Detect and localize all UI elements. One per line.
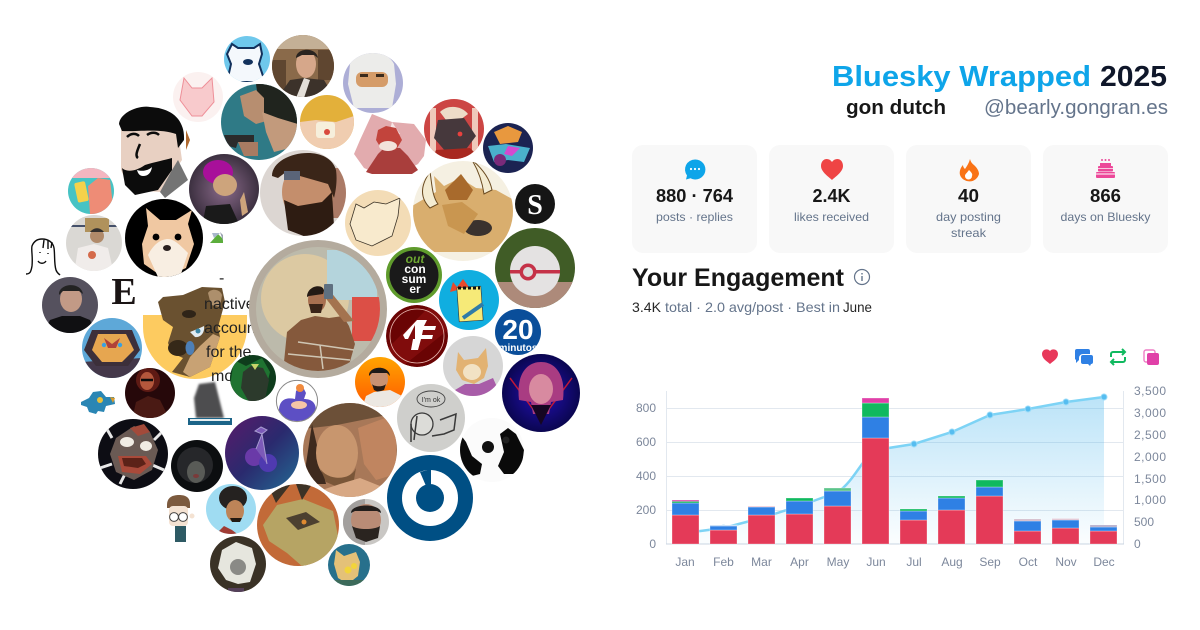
right axis labels: 1,500 <box>1134 472 1166 486</box>
right axis labels: 3,000 <box>1134 406 1166 420</box>
bar: Sep <box>976 480 1003 544</box>
icon: info <box>854 270 870 284</box>
bar: Aug <box>938 496 965 544</box>
avatar: man on orange <box>355 357 408 408</box>
month labels: Aug <box>941 555 963 569</box>
icon: flame <box>960 159 979 181</box>
avatar: fox character <box>443 336 503 396</box>
avatar: purple bear outline <box>276 380 318 423</box>
avatar: S logo: S <box>527 190 543 221</box>
avatar: colourful creature <box>483 123 533 173</box>
cumulative line <box>685 397 1104 533</box>
left axis labels: 200 <box>636 503 656 517</box>
stat card: days on Bluesky <box>1043 145 1168 253</box>
icon: quotes <box>1144 350 1159 365</box>
avatar: 4F logo <box>386 305 448 370</box>
avatar: S logo <box>515 184 555 224</box>
avatar: woman with gun <box>221 84 300 160</box>
avatar: cherries <box>225 416 299 490</box>
text: avatar alt text overflow: accoun <box>204 320 256 337</box>
avatar: man in black shirt <box>42 277 98 336</box>
avatar: roman statue <box>502 354 580 432</box>
line points <box>682 394 1107 536</box>
month labels: May <box>827 555 849 569</box>
avatar: sketched cat <box>345 190 411 256</box>
stat value: 866 <box>1090 186 1121 206</box>
bar: Feb <box>710 525 737 544</box>
bar: Mar <box>748 506 775 544</box>
month labels: Dec <box>1093 555 1115 569</box>
left axis labels: 800 <box>636 401 656 415</box>
month labels: Oct <box>1019 555 1038 569</box>
avatar: cartoon man with glasses <box>167 495 194 542</box>
handle: @bearly.gongran.es <box>984 97 1168 119</box>
bar: Nov <box>1052 518 1079 544</box>
avatar: pink wolf <box>173 72 223 122</box>
text: avatar alt text overflow: for the <box>206 344 251 361</box>
month labels: Jul <box>906 555 922 569</box>
avatar: bald man <box>303 403 397 498</box>
right axis labels: 2,000 <box>1134 450 1166 464</box>
avatar cloud panel <box>26 35 580 594</box>
text: avatar alt text overflow: nactive <box>204 296 255 313</box>
avatar: "I'm ok" doodle <box>397 384 465 452</box>
stat value: 40 <box>958 186 979 206</box>
avatar: cream fox on teal <box>328 544 370 586</box>
avatar: bearded man <box>260 150 348 240</box>
icon: likes <box>1042 349 1058 364</box>
avatar: antlered creature <box>257 484 339 567</box>
avatar: purple-haired character <box>189 154 259 226</box>
month labels: Mar <box>751 555 772 569</box>
engagement summary: June <box>843 299 872 315</box>
text: avatar alt text overflow: mo <box>211 368 233 385</box>
avatar: black and white dog <box>460 428 524 476</box>
avatar: tea and hands <box>300 95 354 149</box>
engagement summary: 3.4K <box>632 299 662 315</box>
stat label: streak <box>951 226 987 240</box>
avatar: otter with phone <box>68 168 114 214</box>
avatar: 20 minutos logo: 20 <box>502 314 534 345</box>
avatar: man with split face <box>343 499 389 545</box>
month labels: Apr <box>790 555 809 569</box>
avatar: green wolf <box>230 355 276 402</box>
left axis labels <box>636 401 656 551</box>
bar: Oct <box>1014 519 1041 544</box>
left axis labels: 400 <box>636 469 656 483</box>
month labels: Nov <box>1055 555 1077 569</box>
icon: reposts <box>1111 349 1125 365</box>
avatar: comic man with beard <box>119 107 190 198</box>
avatar: dark-haired woman <box>171 440 223 492</box>
right axis labels: 1,000 <box>1134 493 1166 507</box>
stat label <box>936 210 1001 240</box>
avatar: outconsumer logo <box>386 247 442 303</box>
stat value: 2.4K <box>812 186 850 206</box>
avatar: bear on keyboard <box>188 382 232 425</box>
heading: your engagement: Your Engagement <box>632 264 845 292</box>
cumulative area <box>685 397 1104 544</box>
bar: Jan <box>672 500 699 544</box>
avatar: ghost line drawing <box>26 239 60 275</box>
title: Bluesky Wrapped <box>832 61 1091 93</box>
left axis labels: 600 <box>636 435 656 449</box>
avatar: E logo: E <box>111 271 137 313</box>
avatar: pixel blue creature <box>81 391 115 414</box>
stat card: streak <box>906 145 1031 253</box>
avatar: man in red light <box>125 368 175 420</box>
avatar: man in suit <box>272 35 336 100</box>
text: avatar alt text overflow: - <box>219 270 224 287</box>
icon: broken image <box>210 232 223 243</box>
month labels: Sep <box>979 555 1001 569</box>
text: avatar alt text overflow <box>204 270 256 385</box>
stat label: days on Bluesky <box>1060 210 1150 224</box>
icon: replies <box>1075 349 1093 366</box>
icon: heart <box>821 159 843 180</box>
avatar: bull <box>412 160 514 261</box>
avatar: notepad <box>439 270 499 330</box>
engagement summary: total · 2.0 avg/post · Best in <box>665 299 840 315</box>
bar: Apr <box>786 498 813 544</box>
avatar: pokeball <box>495 228 575 308</box>
avatar: outconsumer logo: con <box>404 262 426 276</box>
stat card: likes <box>769 145 894 253</box>
title: 2025 <box>1100 61 1167 93</box>
right axis labels: 3,500 <box>1134 384 1166 398</box>
avatar: curly-haired man <box>206 484 256 536</box>
stat label: posts · replies <box>656 210 733 224</box>
avatar: white-bearded man <box>343 52 403 113</box>
stat card: posts and replies <box>632 145 757 253</box>
bar: Dec <box>1090 525 1117 544</box>
display name: gon dutch <box>846 97 946 119</box>
avatar: outconsumer logo: sum <box>402 272 426 286</box>
icon: chat bubble <box>685 159 705 180</box>
stat label: likes received <box>794 210 869 224</box>
avatar: central profile mirror selfie <box>249 240 387 378</box>
stat value: 880 · 764 <box>656 186 733 206</box>
bar: May <box>824 488 851 544</box>
month labels: Feb <box>713 555 734 569</box>
avatar: 20 minutos logo <box>495 309 541 355</box>
avatar: yellow badge with hyena <box>143 287 247 379</box>
avatar: blue bear <box>224 36 270 82</box>
left axis labels: 0 <box>649 537 656 551</box>
avatar: man taking a selfie <box>66 215 122 274</box>
avatar: white fluffy dog <box>210 536 266 594</box>
avatar: 20 minutos logo: minutos <box>499 343 538 354</box>
stat label: day posting <box>936 210 1001 224</box>
chart legend <box>1042 349 1159 366</box>
avatar: dark devil <box>424 99 484 160</box>
stacked bars <box>672 398 1117 544</box>
gridlines and axes <box>666 391 1124 544</box>
month labels <box>675 555 1115 569</box>
chart: monthly engagement <box>636 384 1166 569</box>
avatar: "I'm ok" doodle: I'm ok <box>422 397 441 404</box>
avatar: outconsumer logo: out <box>406 252 425 266</box>
right axis labels: 500 <box>1134 515 1154 529</box>
month labels: Jun <box>866 555 886 569</box>
avatar: blue ring logo <box>387 455 473 541</box>
avatar: outconsumer logo: er <box>409 282 421 296</box>
avatar: red panda on brush strokes <box>354 114 426 174</box>
avatar: angry dog sticker <box>98 419 168 489</box>
right axis labels: 2,500 <box>1134 428 1166 442</box>
bar: Jun <box>862 398 889 544</box>
right axis labels: 0 <box>1134 537 1141 551</box>
bar: Jul <box>900 509 927 544</box>
avatar: shiba <box>125 199 203 278</box>
avatar: lion <box>82 318 142 378</box>
icon: birthday cake <box>1096 159 1116 178</box>
right axis labels <box>1134 384 1166 551</box>
month labels: Jan <box>675 555 695 569</box>
